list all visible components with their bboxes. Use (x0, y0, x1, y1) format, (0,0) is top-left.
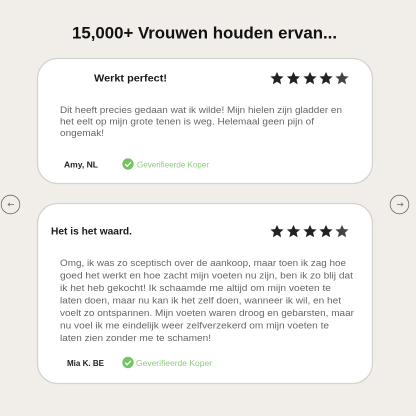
review 2 body text: laten doen, maar nu kan ik het zelf doen, wanneer ik wil, en het (60, 296, 342, 306)
review 2 body text: ik het heb gekocht! Ik schaamde me altijd om mijn voeten te (60, 283, 331, 293)
icon: previous arrow (1, 195, 20, 214)
review 2 body text: goed het werkt en hoe zacht mijn voeten nu zijn, ben ik zo blij dat (60, 270, 354, 280)
review 1 body text: Dit heeft precies gedaan wat ik wilde! Mijn hielen zijn gladder en (60, 105, 342, 115)
review 1 body text (60, 105, 342, 138)
title: 15,000+ Vrouwen houden ervan... (72, 24, 337, 42)
review 1 heading: Werkt perfect! (94, 74, 167, 84)
icon: next arrow (390, 195, 409, 214)
icon: verified check 2 (122, 357, 134, 368)
review 2 body text (60, 258, 354, 343)
panel: review 2 (38, 204, 372, 384)
review 2 verified label: Geverifieerde Koper (136, 359, 212, 368)
review 2 heading: Het is het waard. (51, 226, 132, 238)
review 1 body text: ongemak! (60, 128, 104, 138)
review 1 author: Amy, NL (64, 160, 98, 170)
review 2 body text: voelt zo ontspannen. Mijn voeten waren droog en gebarsten, maar (60, 308, 354, 318)
review 2 author: Mia K. BE (67, 359, 105, 368)
review 2 body text: nu voel ik me eindelijk weer zelfverzekerd om mijn voeten te (60, 320, 329, 330)
review 1 star rating (270, 72, 349, 84)
review 1 body text: het eelt op mijn grote tenen is weg. Helemaal geen pijn of (60, 116, 315, 126)
icon: verified check 1 (122, 158, 134, 170)
review 2 body text: laten zien zonder me te schamen! (60, 333, 211, 343)
review 2 star rating (270, 225, 349, 237)
panel: review 1 (38, 58, 372, 184)
review 1 verified label: Geverifieerde Koper (137, 160, 209, 170)
review 2 body text: Omg, ik was zo sceptisch over de aankoop, maar toen ik zag hoe (60, 258, 346, 268)
